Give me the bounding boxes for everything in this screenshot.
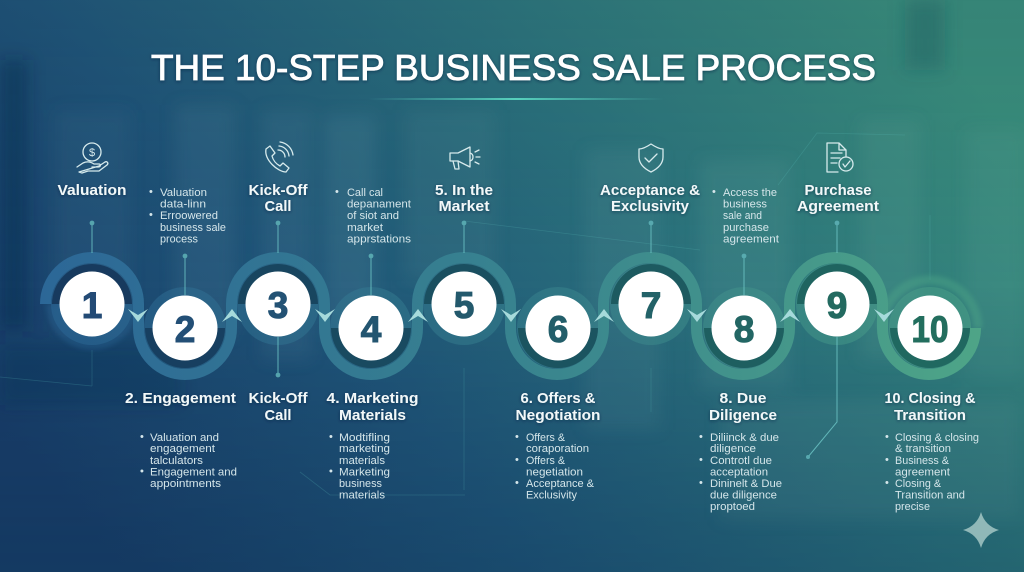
step 10 bottom bullets: Closing & <box>895 478 942 490</box>
decorative network lines <box>0 133 930 495</box>
step 2 bottom bullets: • <box>140 466 144 478</box>
step 4 top bullets: market <box>347 222 383 234</box>
step 10 bottom bullets: • <box>885 454 889 466</box>
step 2 top bullets: process <box>160 234 198 246</box>
icon: sparkle <box>963 512 999 548</box>
step 4 bottom bullets <box>329 431 390 502</box>
step 4 bottom heading <box>326 390 418 424</box>
step 3 bottom heading <box>248 390 309 424</box>
step 8 top bullets <box>712 186 779 246</box>
step 4 top bullets: depanament <box>347 198 411 210</box>
step 10 bottom heading: Transition <box>894 407 966 424</box>
step 8 bottom heading: Diligence <box>709 407 777 424</box>
step 3 bottom heading: Call <box>264 407 292 424</box>
step 10 bottom bullets: • <box>885 477 889 489</box>
step 10 bottom bullets: Business & <box>895 455 950 467</box>
step 8 bottom heading: 8. Due <box>720 390 766 407</box>
step 4 top bullets: of siot and <box>347 210 399 222</box>
step 6 bottom bullets: • <box>515 454 519 466</box>
icon: megaphone <box>450 147 480 169</box>
step 2 top bullets: Erroowered <box>160 210 218 222</box>
step 8 bottom bullets: • <box>699 431 703 443</box>
step 6 bottom heading <box>516 390 600 424</box>
step 8 bottom bullets: • <box>699 454 703 466</box>
step 2 top bullets: • <box>149 209 153 221</box>
step 10 marker <box>889 287 971 369</box>
step 10 bottom bullets: Closing & closing <box>895 432 979 444</box>
step 8 top bullets: • <box>712 186 716 198</box>
step 1 marker <box>51 263 133 345</box>
step 6 bottom bullets: Exclusivity <box>526 490 577 502</box>
step 4 top bullets: • <box>335 186 339 198</box>
step 8 bottom bullets: due diligence <box>710 490 777 502</box>
step 2 bottom bullets: • <box>140 431 144 443</box>
step 2 bottom bullets: engagement <box>150 443 215 455</box>
step 8 top bullets: sale and <box>723 210 762 222</box>
step 2 bottom bullets: Valuation and <box>150 432 219 444</box>
arrows between steps <box>128 309 894 322</box>
step 3 heading top <box>248 182 309 215</box>
icon: hand holding dollar coin <box>77 143 108 173</box>
step 10 bottom heading <box>884 390 976 424</box>
step 6 bottom bullets: • <box>515 477 519 489</box>
step 9 marker: 9 <box>827 285 847 326</box>
step 2 top bullets: • <box>149 186 153 198</box>
step 6 bottom heading: Negotiation <box>516 407 600 424</box>
step 6 marker <box>517 287 599 369</box>
step 1 marker: 1 <box>82 285 102 326</box>
step 4 bottom bullets: Marketing <box>339 466 390 478</box>
step 5 heading: 5. In the <box>435 182 493 199</box>
step 10 bottom bullets: • <box>885 431 889 443</box>
step 3 bottom heading: Kick-Off <box>248 390 309 407</box>
step 7 heading <box>600 182 700 215</box>
step 5 marker <box>423 263 505 345</box>
step 4 bottom bullets: • <box>329 466 333 478</box>
step 7 marker: 7 <box>641 285 661 326</box>
step 8 bottom bullets: Dininelt & Due <box>710 478 782 490</box>
step 6 bottom heading: 6. Offers & <box>520 390 596 407</box>
step 6 bottom bullets: coraporation <box>526 443 589 455</box>
step 8 top bullets: business <box>723 198 767 210</box>
step 2 top bullets: data-linn <box>160 198 206 210</box>
icon: document with check <box>827 143 853 172</box>
step 9 heading <box>797 182 879 215</box>
step 4 top bullets: apprstations <box>347 234 412 246</box>
step 4 bottom heading: Materials <box>339 407 406 424</box>
title: THE 10-STEP BUSINESS SALE PROCESS <box>151 47 876 88</box>
step 4 bottom bullets: Modtifling <box>339 432 390 444</box>
step 9 marker <box>796 263 878 345</box>
step 3 marker <box>237 263 319 345</box>
step 3 heading top: Call <box>264 198 292 215</box>
step 9 heading: Agreement <box>797 198 879 215</box>
glow behind step 10 <box>882 280 978 328</box>
step 8 bottom bullets: • <box>699 477 703 489</box>
step 5 heading: Market <box>438 198 490 215</box>
step 8 top bullets: purchase <box>723 222 769 234</box>
step 8 bottom heading <box>709 390 777 424</box>
step 7 heading: Exclusivity <box>611 198 690 215</box>
step 4 bottom bullets: marketing <box>339 443 390 455</box>
step 2 bottom heading: 2. Engagement <box>125 390 236 407</box>
step 4 bottom bullets: materials <box>339 455 386 467</box>
step 7 marker <box>610 263 692 345</box>
step 3 marker: 3 <box>268 285 288 326</box>
step 2 top bullets: business sale <box>160 222 226 234</box>
step 1 heading: Valuation <box>58 182 126 199</box>
timeline: serpentine ribbon <box>46 258 976 374</box>
glow behind step 1 <box>46 304 138 350</box>
step 3 heading top: Kick-Off <box>248 182 309 199</box>
step 10 marker: 10 <box>912 309 948 350</box>
step 4 bottom heading: 4. Marketing <box>326 390 418 407</box>
step 7 heading: Acceptance & <box>600 182 700 199</box>
step 2 bottom bullets: talculators <box>150 455 204 467</box>
step 6 bottom bullets <box>515 431 595 502</box>
step 4 bottom bullets: business <box>339 478 382 490</box>
icon: hand holding dollar coin: $ <box>89 147 95 159</box>
connector lines <box>90 221 839 459</box>
step 8 bottom bullets: acceptation <box>710 466 768 478</box>
step 2 bottom bullets: Engagement and <box>150 466 237 478</box>
step 8 bottom bullets: Controtl due <box>710 455 772 467</box>
step 8 bottom bullets <box>699 431 782 513</box>
step 8 top bullets: agreement <box>723 234 779 246</box>
icon: shield with check <box>639 144 663 172</box>
step 9 heading: Purchase <box>804 182 872 199</box>
step 8 bottom bullets: Diliinck & due <box>710 432 779 444</box>
step 6 marker: 6 <box>548 309 568 350</box>
step 8 bottom bullets: proptoed <box>710 501 755 513</box>
step 2 top bullets <box>149 186 226 246</box>
step 6 bottom bullets: negetiation <box>526 466 583 478</box>
step 6 bottom bullets: • <box>515 431 519 443</box>
step 6 bottom bullets: Offers & <box>526 455 566 467</box>
step 10 bottom bullets <box>885 431 979 513</box>
step 2 marker: 2 <box>175 309 195 350</box>
step 10 bottom bullets: Transition and <box>895 490 965 502</box>
step 4 top bullets: Call cal <box>347 187 383 199</box>
icon: phone with signal <box>266 142 293 172</box>
step 2 marker <box>144 287 226 369</box>
step 4 bottom bullets: • <box>329 431 333 443</box>
step 4 top bullets <box>335 186 412 246</box>
step 6 bottom bullets: Offers & <box>526 432 566 444</box>
step 6 bottom bullets: Acceptance & <box>526 478 595 490</box>
step 2 top bullets: Valuation <box>160 187 207 199</box>
step 5 marker: 5 <box>454 285 474 326</box>
step 2 bottom bullets <box>140 431 237 490</box>
step 4 marker <box>330 287 412 369</box>
step 10 bottom bullets: precise <box>895 501 930 513</box>
step 8 marker: 8 <box>734 309 754 350</box>
step 2 bottom bullets: appointments <box>150 478 222 490</box>
step 5 heading <box>435 182 493 215</box>
step 4 marker: 4 <box>361 309 382 350</box>
step 10 bottom heading: 10. Closing & <box>884 390 976 407</box>
step 8 marker <box>703 287 785 369</box>
step 10 bottom bullets: agreement <box>895 466 950 478</box>
step 4 bottom bullets: materials <box>339 490 386 502</box>
step 8 bottom bullets: diligence <box>710 443 756 455</box>
step 10 bottom bullets: & transition <box>895 443 951 455</box>
step 8 top bullets: Access the <box>723 187 777 199</box>
